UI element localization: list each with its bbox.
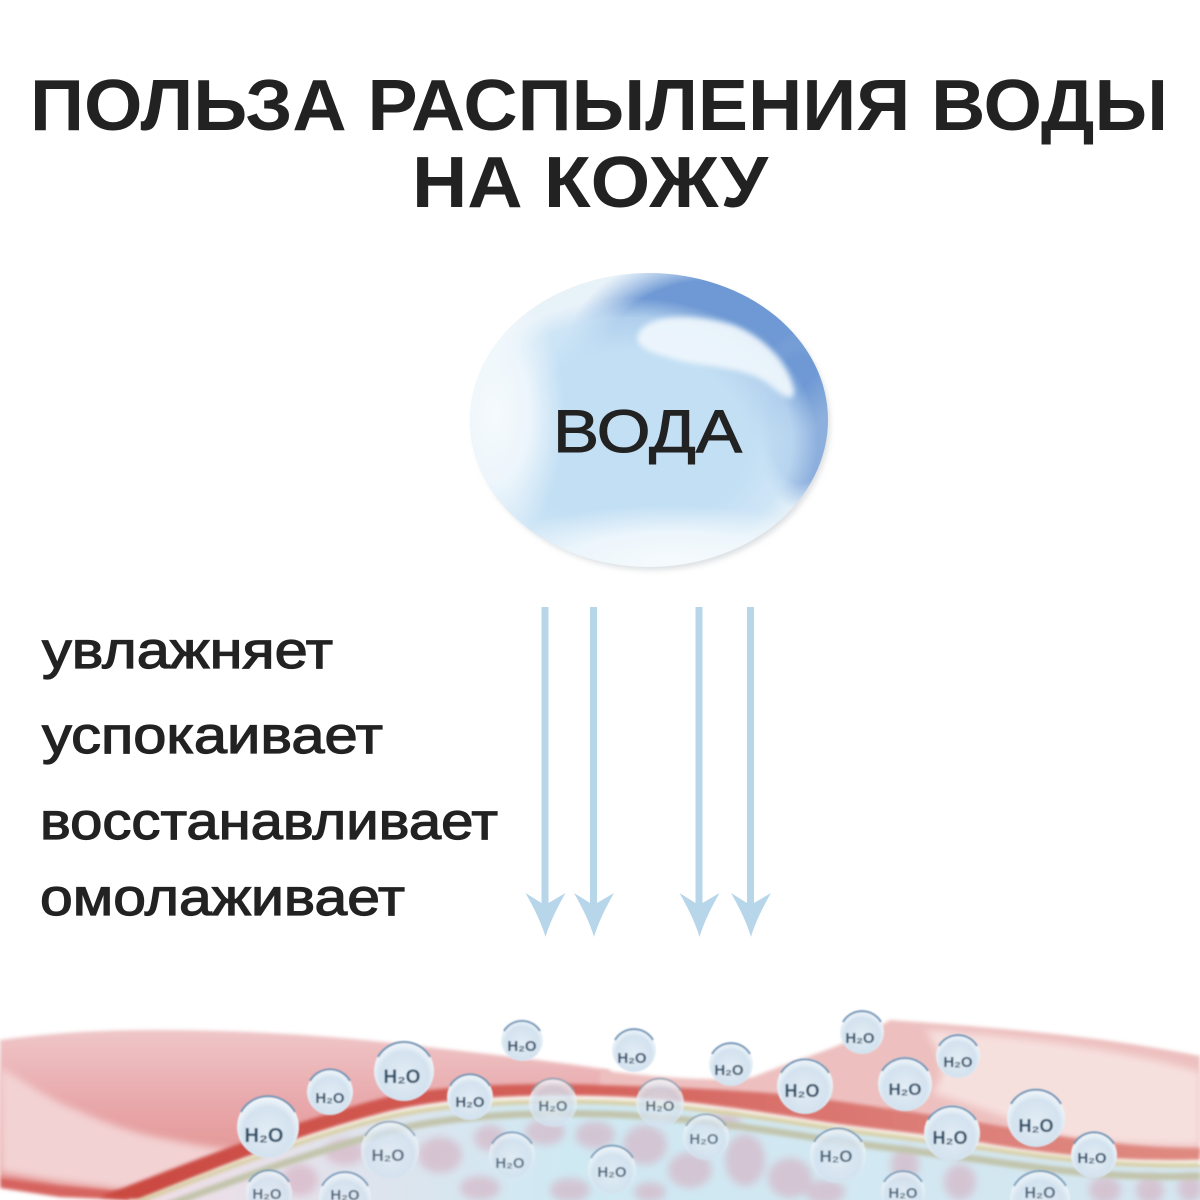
- molecule: [1071, 1132, 1117, 1178]
- molecule: [361, 1121, 419, 1179]
- molecule: H₂O: [1018, 1116, 1054, 1136]
- molecule: H₂O: [932, 1128, 968, 1148]
- epidermis tan lines: [135, 1102, 1200, 1200]
- molecule: [501, 1019, 543, 1061]
- benefits list: восстанавливает: [40, 793, 498, 851]
- molecule: H₂O: [689, 1131, 719, 1148]
- molecule: H₂O: [784, 1081, 820, 1101]
- arrow 3: [680, 607, 720, 937]
- molecule: [374, 1041, 434, 1101]
- molecule: [1007, 1089, 1065, 1147]
- benefits list: омолаживает: [40, 869, 405, 927]
- molecule: H₂O: [507, 1038, 537, 1055]
- molecule: H₂O: [617, 1050, 647, 1067]
- molecule: [924, 1105, 980, 1161]
- molecule: [612, 1028, 656, 1072]
- light skin fold right: [925, 1030, 1200, 1145]
- molecule: [709, 1042, 753, 1086]
- molecule: [588, 1146, 636, 1194]
- red rim bottom left: [0, 1177, 130, 1200]
- molecule: H₂O: [315, 1090, 345, 1107]
- molecule: [447, 1074, 493, 1120]
- molecule: [881, 1170, 925, 1200]
- benefits list: [40, 622, 498, 927]
- skin cross-section: [0, 1020, 1200, 1200]
- benefits list: успокаивает: [42, 707, 383, 765]
- molecule: H₂O: [384, 1067, 420, 1088]
- molecule: H₂O: [371, 1146, 405, 1165]
- label: water: ВОДА: [553, 398, 742, 465]
- molecule: [237, 1096, 299, 1158]
- skin surface left: [0, 1030, 610, 1197]
- molecule: [683, 1114, 729, 1160]
- skin surface right: [600, 1020, 1200, 1155]
- molecule: [319, 1172, 371, 1200]
- molecule: [489, 1132, 535, 1178]
- molecule: [777, 1058, 833, 1114]
- molecule: H₂O: [888, 1080, 922, 1099]
- water molecules: [237, 1010, 1117, 1200]
- molecule: H₂O: [495, 1155, 525, 1172]
- molecule: H₂O: [245, 1125, 283, 1147]
- benefits list: увлажняет: [42, 622, 333, 680]
- molecule: H₂O: [645, 1098, 675, 1115]
- molecule: H₂O: [845, 1030, 875, 1047]
- molecule: [840, 1010, 884, 1054]
- water drop with label: [470, 273, 832, 572]
- molecule: [810, 1127, 866, 1183]
- arrow 1: [526, 607, 566, 937]
- molecule: H₂O: [943, 1054, 973, 1071]
- molecule: [936, 1034, 980, 1078]
- title: [30, 66, 1168, 223]
- molecule: [246, 1170, 292, 1200]
- title: НА КОЖУ: [412, 143, 769, 223]
- arrows: [526, 607, 771, 937]
- molecule: H₂O: [1077, 1150, 1107, 1167]
- light skin fold left: [0, 1067, 235, 1190]
- molecule: H₂O: [455, 1094, 485, 1111]
- title: ПОЛЬЗА РАСПЫЛЕНИЯ ВОДЫ: [30, 66, 1168, 146]
- cell layer: [140, 1102, 1200, 1200]
- arrow 4: [731, 607, 771, 937]
- molecule: [529, 1079, 577, 1127]
- molecule: [1010, 1170, 1070, 1200]
- molecule: [307, 1069, 353, 1115]
- molecule: [636, 1079, 684, 1127]
- arrow 2: [574, 607, 614, 937]
- molecule: H₂O: [819, 1147, 853, 1166]
- dermis red band: [100, 1084, 1200, 1200]
- molecule: H₂O: [714, 1062, 744, 1079]
- cells: [282, 1112, 1200, 1200]
- molecule: H₂O: [538, 1098, 568, 1115]
- molecule: H₂O: [597, 1164, 627, 1181]
- molecule: [878, 1057, 932, 1111]
